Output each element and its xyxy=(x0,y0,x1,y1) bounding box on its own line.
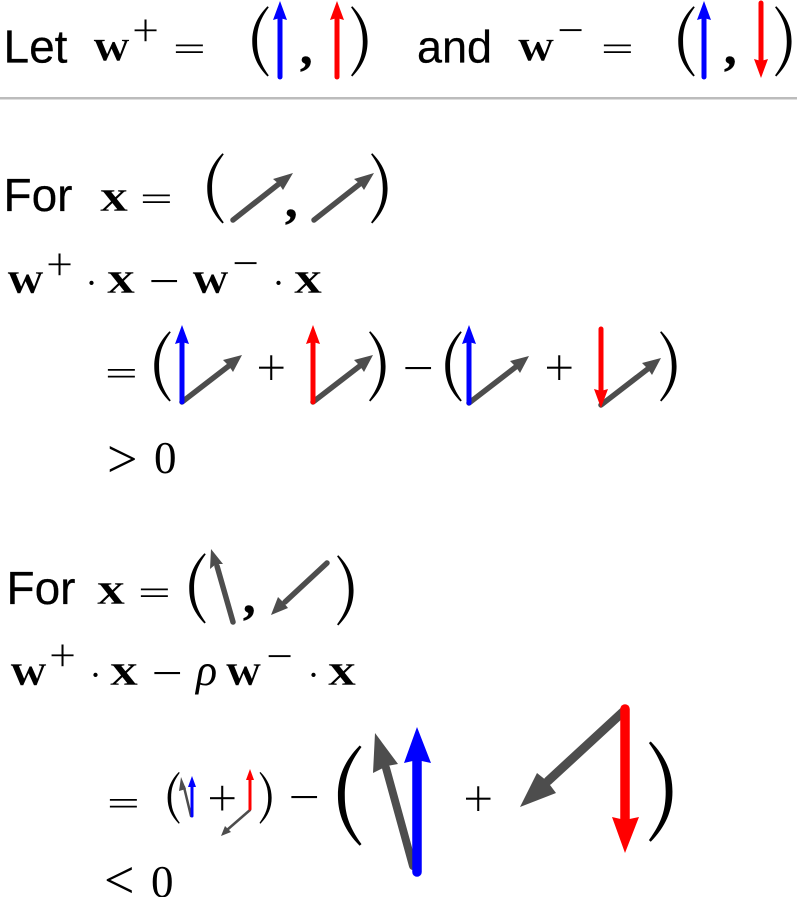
tuple: two gray vectors: , xyxy=(243,568,256,624)
symbol: bold w minus: w xyxy=(518,20,554,70)
formula: w+ x minus w- x: · xyxy=(272,263,284,303)
text: and: and xyxy=(417,22,492,72)
heading: For x =: x xyxy=(100,170,128,221)
expansion: difference of dot products: + xyxy=(256,338,286,398)
result: greater than zero xyxy=(107,429,176,489)
heading: For x =: For xyxy=(6,562,76,614)
formula: w+ x minus rho w- x: x xyxy=(328,644,356,695)
formula: w+ x minus rho w- x: w xyxy=(226,644,261,695)
symbol: bold w plus: w xyxy=(94,20,130,70)
vectors: blue and gray xyxy=(462,325,529,403)
tuple: two gray vectors: ( xyxy=(183,532,208,629)
formula: w+ x minus w- x: − xyxy=(232,237,259,290)
formula: w+ x minus rho w- x: − xyxy=(266,630,293,683)
expansion: difference of dot products xyxy=(105,310,683,408)
symbol: bold w minus xyxy=(518,4,584,70)
expansion: difference of dot products: − xyxy=(402,337,434,400)
expansion: difference of dot products: ) xyxy=(658,310,683,407)
tuple: two gray vectors xyxy=(183,532,360,631)
tuple: two diagonal gray vectors: ( xyxy=(201,132,226,229)
arrow: blue up xyxy=(273,1,287,77)
text: Let: Let xyxy=(4,20,68,72)
heading: For x =: For xyxy=(4,169,72,221)
tuple: two diagonal gray vectors: ) xyxy=(369,132,394,229)
formula: w+ x minus rho w- x: w xyxy=(10,644,46,695)
vectors: small gray and blue xyxy=(179,776,196,816)
case 2: negative example xyxy=(6,532,681,897)
expansion: small term minus large term: − xyxy=(288,766,320,829)
vectors: red down and gray xyxy=(594,329,661,408)
formula: w+ x minus rho w- x: ρ xyxy=(194,646,217,695)
tuple: blue up and red up: , xyxy=(300,19,312,75)
heading: For x = xyxy=(4,169,173,221)
formula: w+ x minus w- x: x xyxy=(294,252,322,303)
definition row: w plus and w minus xyxy=(4,0,797,82)
expansion: small term minus large term: + xyxy=(463,769,493,829)
expansion: small term minus large term: ( xyxy=(329,713,364,853)
vectors: blue and gray xyxy=(175,325,242,402)
symbol: equals: = xyxy=(601,31,634,68)
symbol: bold w plus: + xyxy=(132,4,159,57)
result: less than zero xyxy=(104,850,174,897)
formula: w+ x minus w- x xyxy=(8,237,322,313)
formula: w+ x minus rho w- x: − xyxy=(151,642,183,705)
heading: For x = xyxy=(6,562,171,614)
expansion: difference of dot products: ( xyxy=(148,310,173,407)
tuple: blue up and red down xyxy=(672,0,797,82)
expansion: small term minus large term: + xyxy=(207,768,237,828)
formula: w+ x minus w- x: · xyxy=(86,263,98,303)
tuple: two diagonal gray vectors xyxy=(201,132,394,229)
expansion: difference of dot products: = xyxy=(105,355,138,392)
formula: w+ x minus w- x: x xyxy=(107,252,135,303)
formula: w+ x minus w- x: w xyxy=(192,252,228,303)
arrow: gray diagonal xyxy=(233,173,293,220)
expansion: difference of dot products: + xyxy=(544,338,574,398)
formula: w+ x minus rho w- x xyxy=(10,629,356,705)
vectors: large gray and red xyxy=(520,709,639,853)
arrow: gray diagonal xyxy=(314,173,374,220)
symbol: bold w plus xyxy=(94,4,159,70)
formula: w+ x minus w- x: + xyxy=(46,238,73,291)
formula: w+ x minus rho w- x: + xyxy=(49,629,76,682)
tuple: two gray vectors: ) xyxy=(335,534,360,631)
expansion: small term minus large term: = xyxy=(107,785,140,822)
symbol: equals: = xyxy=(173,31,206,68)
expansion: difference of dot products: ) xyxy=(367,310,392,407)
vectors: red and gray xyxy=(306,325,373,402)
arrow: red down xyxy=(754,3,768,78)
arrow: gray down-left xyxy=(271,563,327,615)
formula: w+ x minus w- x: w xyxy=(8,252,44,303)
arrow: red up xyxy=(330,1,344,77)
formula: w+ x minus w- x: − xyxy=(148,250,180,313)
formula: w+ x minus rho w- x: · xyxy=(90,655,102,695)
formula: w+ x minus rho w- x: · xyxy=(308,655,320,695)
expansion: small term minus large term xyxy=(107,709,681,872)
vectors: large gray and blue xyxy=(373,727,431,872)
case 1: positive example xyxy=(4,132,683,489)
heading: For x =: = xyxy=(138,575,171,612)
result: greater than zero: > xyxy=(107,429,137,489)
expansion: small term minus large term: ( xyxy=(163,756,181,828)
expansion: small term minus large term: ) xyxy=(258,756,276,828)
result: greater than zero: 0 xyxy=(154,433,176,483)
expansion: difference of dot products: ( xyxy=(439,310,464,407)
arrow: blue up xyxy=(697,1,711,77)
symbol: bold w minus: − xyxy=(557,4,584,57)
expansion: small term minus large term: ) xyxy=(646,709,681,849)
arrow: gray up-left xyxy=(210,549,233,622)
tuple: blue up and red down: , xyxy=(724,19,736,75)
formula: w+ x minus rho w- x: x xyxy=(110,644,138,695)
vectors: small red and gray xyxy=(221,769,254,836)
heading: For x =: = xyxy=(140,181,173,218)
tuple: two diagonal gray vectors: , xyxy=(285,172,298,228)
tuple: blue up and red up xyxy=(246,0,374,82)
heading: For x =: x xyxy=(97,563,125,614)
